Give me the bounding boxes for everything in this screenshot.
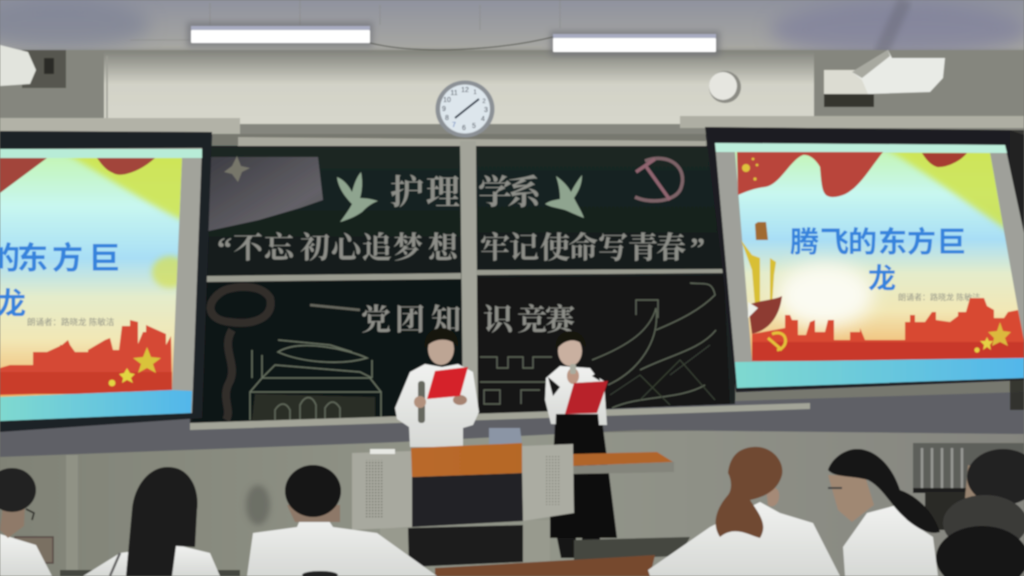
left slide stars [109,347,161,386]
chalk dove right [545,175,584,218]
female speaker legs [557,538,600,558]
wall clock: 5 [472,123,476,130]
left slide taskbar [0,390,192,421]
radiator [913,443,1024,530]
blackboard top rail [238,137,706,148]
lecture desk monitor behind podium [489,428,522,444]
chalk great wall drawing [480,283,716,408]
male speaker hands and microphone [418,381,425,423]
chalk flag [204,157,323,232]
right slide title: 腾飞的东方巨 [790,226,966,259]
blackboard chalk tray [190,403,810,430]
chalk flag stars [224,156,250,182]
chalk hammer and sickle [635,158,683,201]
right projection screen [715,143,1024,388]
smoke detector [709,71,741,103]
student with brown ponytail [648,447,840,576]
ceiling light right [550,31,720,56]
podium [352,443,574,567]
right slide party emblem [768,333,786,350]
chalk pillar drawing [211,287,271,420]
chalk heading: slogan: “不忘初心追梦想牢记使命写青春” [217,232,705,265]
lower wall [0,425,1024,576]
wall shadow band under board [0,392,1024,457]
podium vent dots [366,455,561,518]
ceiling [0,0,1024,62]
podium orange top [411,443,522,477]
right screen housing [705,127,1024,392]
wall clock: 7 [452,122,456,129]
chalk dash [310,305,360,310]
right slide background [735,152,1024,361]
right slide red flag [737,152,883,197]
board divider rail [200,269,724,282]
right slide taskbar [735,358,1024,388]
right slide flag stars [742,158,758,181]
left screen housing [0,131,212,432]
chalk gate tower drawing [250,340,381,420]
floor skirting [60,537,690,576]
wall clock [436,80,494,138]
male speaker shirt [395,364,479,447]
right projection screen: 龙 [868,263,896,294]
student with glasses and black ponytail [828,449,940,576]
blackboard [190,141,735,424]
student short hair centre [247,465,437,576]
student with long hair [83,467,220,576]
right slide stars [974,322,1011,353]
wall clock: 1 [473,90,477,96]
chalk dove left [337,172,378,222]
ceiling light left [187,22,373,47]
wall clock: 6 [462,125,466,132]
female speaker head [558,336,582,366]
wall clock: 10 [443,97,451,104]
female speaker skirt [549,405,617,538]
wall clock: 12 [461,87,469,94]
poster on wall [15,537,53,563]
female speaker red folder [565,381,608,414]
chalk heading: contest: 党团知识竞赛 [361,303,577,337]
chalk heading: department: 护理学系 [390,174,542,212]
male speaker head [428,333,454,365]
student far left [0,468,52,576]
side table [573,452,674,474]
wall clock: 11 [450,90,458,97]
upper wall [0,50,1024,134]
left slide skyline [0,320,172,395]
female speaker [545,331,617,558]
male speaker red folder [427,367,468,399]
left projection screen [0,148,202,421]
ceiling wire [370,37,553,50]
left slide presenters: 朗诵者：路晓龙 陈敏洁 [27,317,115,327]
board centre post [460,141,478,418]
wall pipe [66,455,78,576]
wall clock: 2 [482,99,486,105]
right projector [824,50,945,107]
wall clock: 8 [445,115,449,122]
left slide background [0,158,182,397]
wall clock: 9 [442,106,446,113]
male speaker [395,328,479,447]
wall clock: 3 [484,107,488,114]
wall clock: 4 [481,116,485,123]
right slide presenters: 朗诵者：路晓龙 陈敏洁 [898,292,980,302]
front desk [435,555,655,576]
left projector [0,45,66,88]
students far right [936,449,1024,576]
right slide skyline [752,298,1024,361]
female speaker blouse and tunic [545,366,607,425]
right slide tower [741,222,782,334]
wall stain [246,485,270,525]
